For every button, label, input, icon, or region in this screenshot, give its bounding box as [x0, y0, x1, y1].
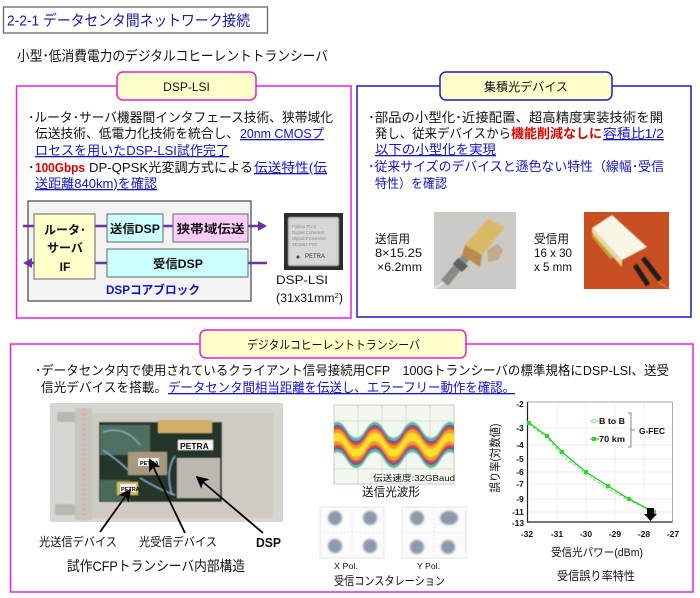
caption: transmitter size: 8×15.25	[375, 246, 422, 260]
chart: transmit optical waveform	[334, 404, 454, 484]
receive DSP block	[107, 249, 248, 277]
caption: DSP-LSI size: DSP-LSI	[276, 273, 328, 287]
x axis ticks: -30	[580, 529, 592, 539]
router server IF block: ルータ･	[44, 223, 86, 237]
caption: DSP-LSI size: 2	[335, 293, 339, 300]
caption: DSP-LSI size: (31x31mm	[276, 293, 330, 305]
router server IF block: IF	[60, 260, 70, 274]
photo: CFP transceiver internals	[50, 403, 283, 522]
arrow: signal lines	[23, 221, 267, 268]
panel: DSP-LSI	[16, 72, 351, 318]
transmit DSP block: 送信DSP	[110, 221, 160, 236]
icon: transmitter device photo	[433, 212, 516, 289]
legend: B to B	[599, 416, 625, 426]
labels: internal component names: 光受信デバイス	[139, 534, 217, 549]
router server IF block: サーバ	[47, 241, 83, 255]
text block: optical device bullets	[368, 110, 664, 191]
caption: transmitter size: ×6.2mm	[377, 260, 422, 274]
icon: DSP-LSI chip photo	[284, 213, 343, 270]
legend: 70 km	[599, 434, 625, 444]
text block: transceiver description	[35, 363, 669, 395]
text block: transceiver description: データセンタ間相当距離を伝送し、エラーフリー動作を確認。	[168, 380, 515, 395]
icon: DSP-LSI chip photo: PETRA	[305, 254, 325, 260]
text block: optical device bullets: 以下の小型化を実現	[375, 142, 496, 157]
panel: integrated optical devices	[357, 72, 691, 317]
text block: optical device bullets: 発し、従来デバイスから	[375, 126, 511, 141]
text block: DSP-LSI bullets: ･ルータ･サーバ機器間インタフェース技術、狭帯域化	[28, 110, 333, 125]
arrow: to optical receiver	[150, 460, 185, 533]
heading: optical devices tab: 集積光デバイス	[484, 79, 568, 94]
title	[4, 7, 268, 33]
caption: receiver size: 16 x 30	[534, 246, 572, 260]
y axis ticks: -4	[516, 440, 524, 450]
text block: transceiver description: 信光デバイスを搭載。	[41, 380, 167, 395]
legend: G-FEC	[639, 426, 665, 436]
y axis ticks: -11	[512, 507, 524, 517]
heading: DSP-LSI tab: DSP-LSI	[163, 80, 210, 94]
text block: optical device bullets: ･従来サイズのデバイスと遜色ない特性（線幅･受信	[368, 159, 664, 174]
icon: DSP-LSI chip photo: Signal Processor	[292, 236, 327, 241]
caption: DSP-LSI size	[276, 273, 343, 305]
panel: digital coherent transceiver	[10, 330, 693, 592]
chart: Y pol constellation	[402, 507, 466, 558]
chart: BER characteristics	[489, 399, 679, 559]
photo: CFP transceiver internals: PETRA	[121, 487, 140, 493]
caption: CFP internal structure: 試作CFPトランシーバ内部構造	[67, 558, 245, 574]
labels: polarization: X Pol.	[334, 561, 358, 571]
title: 2-2-1 データセンタ間ネットワーク接続	[7, 12, 250, 30]
text block: optical device bullets: ･部品の小型化･近接配置、超高精度実装技術を開	[368, 110, 663, 125]
labels: internal component names: DSP	[256, 536, 281, 550]
y axis ticks: -5	[516, 454, 524, 464]
y axis ticks: -3	[516, 423, 524, 433]
subtitle: 小型･低消費電力のデジタルコヒーレントトランシーバ	[17, 48, 328, 64]
heading: DSP-LSI tab	[117, 72, 256, 100]
caption: receiver size: 受信用	[534, 232, 569, 246]
y axis ticks	[512, 399, 524, 528]
text block: transceiver description: ･データセンタ内で使用されているクライアント信号接続用CFP 100Gトランシーバの標準規格にDSP-LSI、送受	[35, 363, 669, 378]
receive DSP block: 受信DSP	[153, 256, 203, 271]
photo: CFP transceiver internals: PETRA	[140, 461, 159, 467]
y axis ticks: -6	[516, 467, 524, 477]
chart: X pol constellation	[320, 507, 384, 558]
icon: DSP-LSI chip photo: Fujitsu FUJI	[292, 224, 316, 229]
transmit DSP block	[107, 214, 163, 242]
icon: error-free arrow	[644, 508, 657, 521]
x axis ticks: -32	[521, 529, 533, 539]
heading: transceiver tab: デジタルコヒーレントトランシーバ	[247, 337, 420, 352]
labels: polarization: Y Pol.	[417, 561, 440, 571]
caption: receiver size	[534, 232, 572, 274]
y axis ticks: -13	[512, 518, 524, 528]
chart: transmit optical waveform: 伝送速度:32GBaud	[373, 473, 455, 483]
labels: internal component names: 光送信デバイス	[39, 534, 117, 549]
text block: DSP-LSI bullets: 伝送技術、低電力化技術を統合し、	[35, 126, 239, 141]
heading: transceiver tab	[200, 330, 466, 358]
icon: DSP-LSI chip photo: Digital Coherent	[292, 230, 325, 235]
series: B to B	[529, 424, 654, 513]
caption: received constellation: 受信コンスタレーション	[334, 574, 445, 588]
text block: DSP-LSI bullets: DP-QPSK光変調方式による	[89, 160, 253, 175]
x axis ticks: -27	[667, 529, 679, 539]
text block: DSP-LSI bullets: ･	[28, 160, 34, 175]
labels: internal component names	[39, 534, 281, 550]
text block: optical device bullets: 特性）を確認	[375, 176, 447, 191]
photo: CFP transceiver internals: PETRA	[180, 441, 209, 451]
text block: DSP-LSI bullets: 伝送特性(伝	[254, 160, 327, 175]
caption: transmit waveform: 送信光波形	[362, 484, 420, 499]
y axis ticks: -2	[516, 399, 524, 409]
y axis ticks: -9	[516, 494, 524, 504]
x axis ticks	[521, 529, 679, 539]
caption: transmitter size	[375, 231, 422, 274]
labels: polarization	[334, 561, 440, 571]
x axis ticks: -28	[638, 529, 650, 539]
x axis title: 受信光パワー(dBm)	[551, 545, 643, 559]
y axis title: 誤り率(対数値)	[489, 423, 502, 492]
text block: optical device bullets: 容積比1/2	[603, 126, 664, 141]
series: 70 km	[527, 421, 656, 514]
diagram: DSP core block	[23, 201, 267, 301]
x axis ticks: -29	[609, 529, 621, 539]
caption: receiver size: x 5 mm	[534, 260, 572, 274]
legend	[590, 413, 665, 447]
y axis ticks: -7	[516, 479, 524, 489]
icon: DSP-LSI chip photo: ZE1987 P00	[292, 242, 318, 247]
text block: DSP-LSI bullets: 100Gbps	[35, 160, 85, 175]
text block: DSP-LSI bullets: 送距離840km)を確認	[35, 176, 157, 191]
text block: optical device bullets: 機能削減なしに	[511, 126, 602, 141]
DSP core block label: DSPコアブロック	[106, 282, 200, 297]
narrowband transmission block	[173, 214, 248, 242]
x axis ticks: -31	[551, 529, 563, 539]
narrowband transmission block: 狭帯域伝送	[176, 221, 244, 236]
caption: DSP-LSI size: )	[339, 293, 343, 305]
router server IF block	[34, 214, 95, 279]
caption: BER characteristics: 受信誤り率特性	[557, 568, 635, 583]
text block: DSP-LSI bullets	[28, 110, 333, 191]
text block: DSP-LSI bullets: ロセスを用いたDSP-LSI試作完了	[35, 143, 229, 158]
caption: transmitter size: 送信用	[375, 231, 410, 246]
plot area	[527, 402, 673, 522]
arrow: to optical transmitter	[100, 490, 130, 532]
arrow: to DSP	[197, 477, 263, 533]
text block: DSP-LSI bullets: 20nm CMOSプ	[240, 126, 324, 141]
icon: receiver device photo	[584, 212, 669, 289]
heading: optical devices tab	[440, 72, 612, 100]
